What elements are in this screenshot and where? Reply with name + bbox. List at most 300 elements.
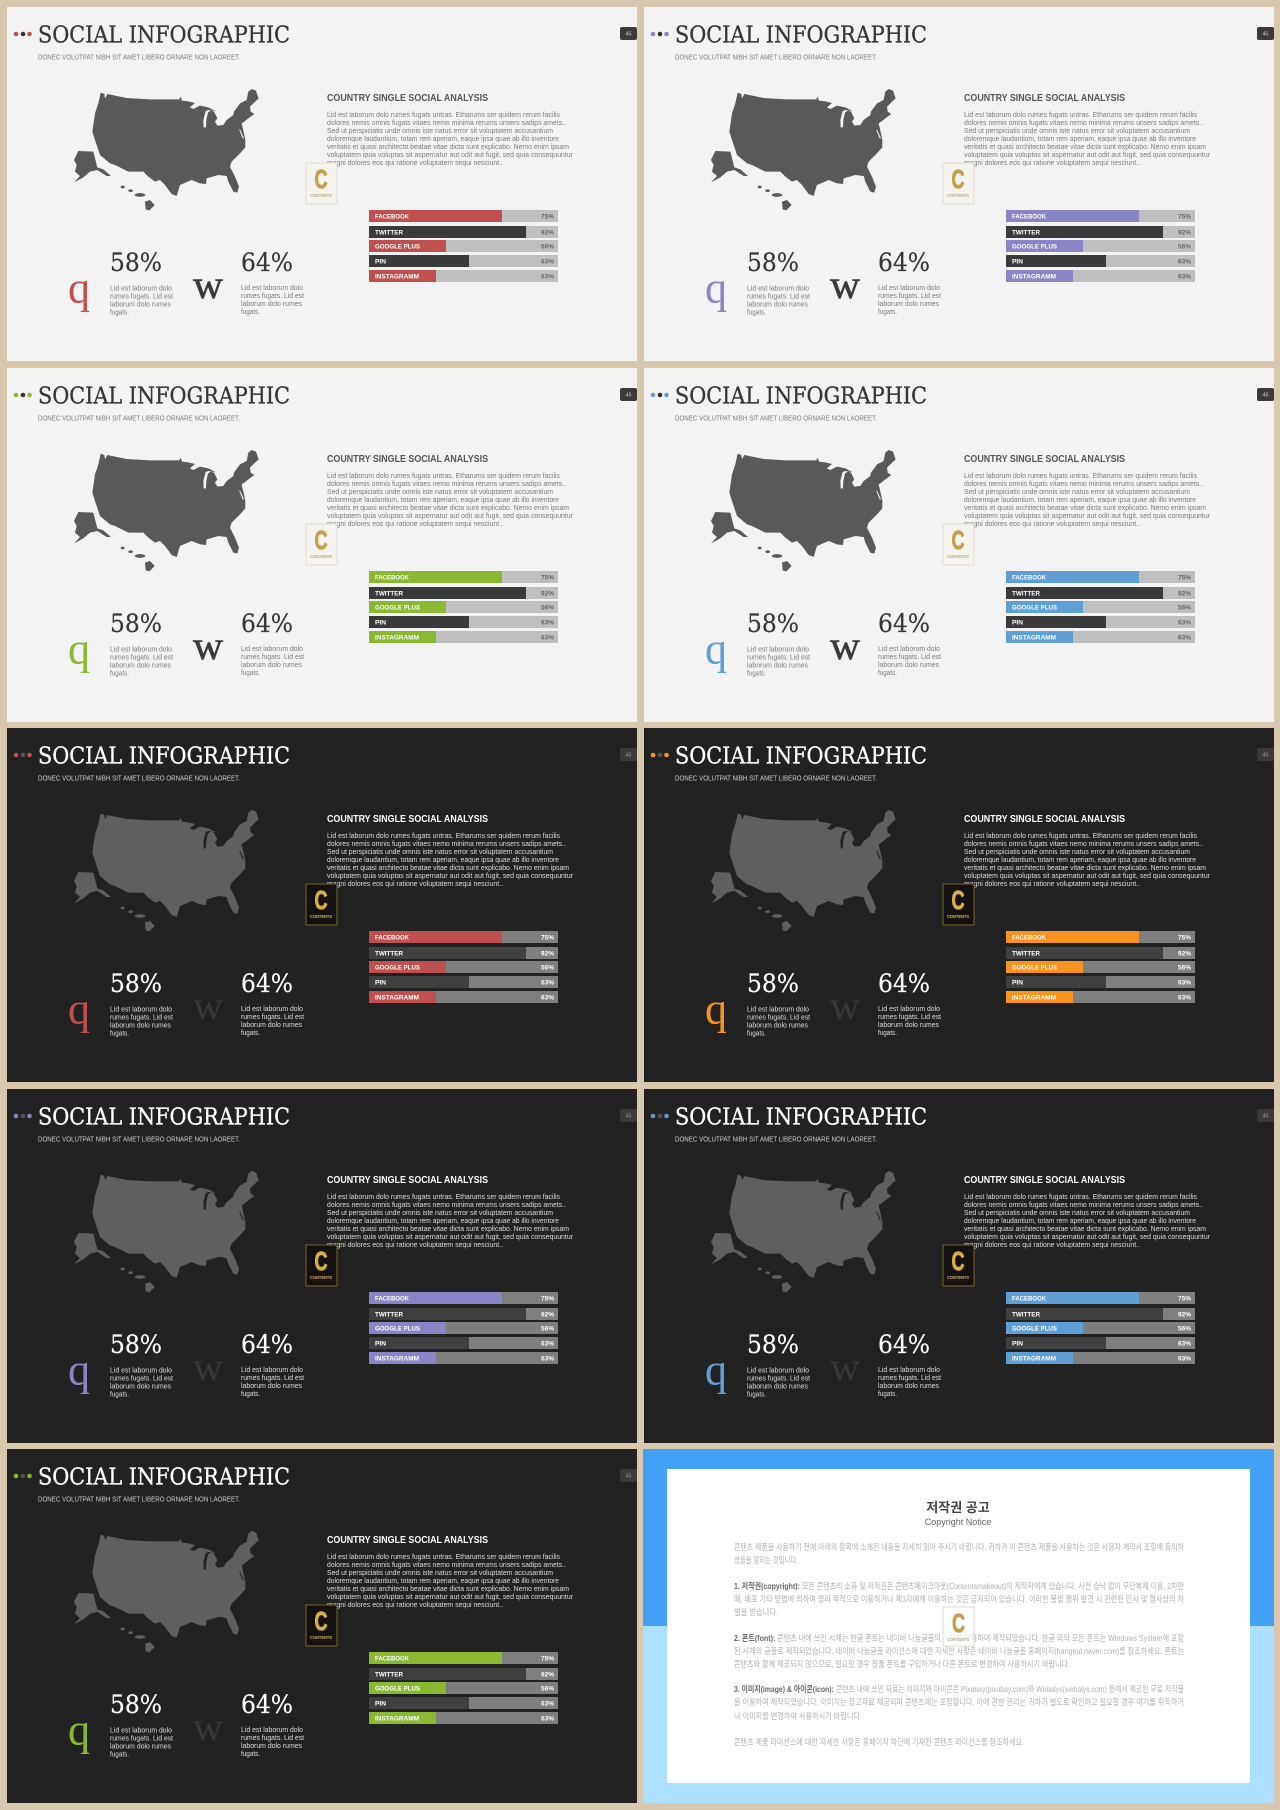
bar chart: INSTAGRAMM: [1012, 634, 1056, 641]
stat: 64%: rumes fugats. Lid est: [878, 1373, 941, 1382]
bar chart: [369, 210, 558, 282]
bar chart: 63%: [1178, 635, 1192, 641]
stat: 58%: Lid est laborum dolo: [110, 284, 172, 292]
icon: q: q: [705, 984, 727, 1034]
page badge: [620, 748, 637, 761]
bar chart: 56%: [541, 965, 555, 971]
analysis text block: Lid est laborum dolo rumes fugats untras. Etharums ser quidem rerum facilis: [327, 471, 560, 480]
stat: 64%: fugats.: [241, 1389, 260, 1398]
bar chart: 63%: [1178, 274, 1192, 280]
stat: 64%: laborum dolo rumes: [878, 1020, 939, 1029]
copyright section 3: [734, 1683, 1184, 1721]
title: SOCIAL INFOGRAPHIC: [38, 384, 290, 410]
analysis text block: magni dolores eos qui ratione voluptatem sequi nesciunt..: [327, 519, 503, 528]
subtitle: DONEC VOLUTPAT NIBH SIT AMET LIBERO ORNARE NON LAOREET.: [38, 1136, 240, 1144]
bar chart: INSTAGRAMM: [375, 1355, 419, 1362]
stat: 58%: laborum dolo rumes: [747, 300, 808, 308]
analysis text block: Lid est laborum dolo rumes fugats untras. Etharums ser quidem rerum facilis: [327, 110, 560, 119]
copyright section 3: 을 이용하여 제작되었습니다. 이미지는 참고자료 제공되며 콘텐츠에는 포함합니다. 이에 관한 권리는 귀하가 별도로 확인하고 필요할 경우 여기를 취득하거: [734, 1696, 1184, 1707]
stat: 64%: laborum dolo rumes: [241, 1020, 302, 1029]
logo stamp: [306, 1605, 337, 1646]
stat: 58%: [747, 609, 810, 678]
title: SOCIAL INFOGRAPHIC: [675, 1104, 927, 1130]
stat: 64%: fugats.: [241, 1749, 260, 1758]
stat: 64%: Lid est laborum dolo: [241, 1365, 303, 1374]
analysis text block: doloremque laudantium, totam rem aperiam, eaque ipsa quae ab illo inventore: [964, 855, 1196, 864]
bar chart: INSTAGRAMM: [1012, 994, 1056, 1001]
bar chart: INSTAGRAMM: [375, 994, 419, 1001]
bar chart: TWITTER: [375, 229, 403, 236]
analysis text block: Sed ut perspiciatis unde omnis iste natus error sit voluptatem accusantium: [327, 1208, 553, 1217]
analysis text block: Lid est laborum dolo rumes fugats untras. Etharums ser quidem rerum facilis: [327, 831, 560, 840]
stat: 64%: [241, 609, 304, 677]
stat: 64%: [878, 969, 941, 1037]
stat: 64%: rumes fugats. Lid est: [241, 1733, 304, 1742]
bar chart: INSTAGRAMM: [375, 1715, 419, 1722]
bar chart: FACEBOOK: [1012, 574, 1046, 581]
copyright heading: 저작권 공고: [926, 1500, 990, 1515]
analysis text block: COUNTRY SINGLE SOCIAL ANALYSIS: [327, 92, 488, 104]
bar chart: 56%: [1178, 605, 1192, 611]
analysis text block: voluptatem quia voluptas sit aspernatur aut odit aut fugit, sed quia consequuntur: [327, 511, 574, 520]
panel: light red slide: [7, 7, 637, 361]
title dots: [651, 393, 669, 397]
bar chart: GOOGLE PLUS: [375, 964, 421, 971]
stat: 58%: 58%: [110, 1690, 162, 1720]
analysis text block: COUNTRY SINGLE SOCIAL ANALYSIS: [327, 1174, 488, 1186]
stat: 64%: 64%: [241, 969, 293, 999]
panel: dark blue slide: [644, 1089, 1274, 1443]
analysis text block: magni dolores eos qui ratione voluptatem sequi nesciunt..: [964, 1240, 1140, 1249]
subtitle: DONEC VOLUTPAT NIBH SIT AMET LIBERO ORNARE NON LAOREET.: [38, 1496, 240, 1504]
analysis text block: dolores nemis omnis fugats vitaes nemo minima rerums unsers sadips amets..: [327, 1560, 566, 1569]
logo stamp: C: [952, 164, 965, 194]
analysis text block: doloremque laudantium, totam rem aperiam, eaque ipsa quae ab illo inventore: [964, 134, 1196, 143]
icon: w: w: [193, 1704, 223, 1749]
bar chart: GOOGLE PLUS: [375, 1685, 421, 1692]
icon: w: w: [830, 623, 860, 668]
stat: 58%: 58%: [747, 609, 799, 639]
analysis text block: doloremque laudantium, totam rem aperiam, eaque ipsa quae ab illo inventore: [327, 1216, 559, 1225]
panel: light green slide: [7, 368, 637, 722]
US map: [711, 810, 896, 931]
analysis text block: Sed ut perspiciatis unde omnis iste natus error sit voluptatem accusantium: [964, 126, 1190, 135]
bar chart: GOOGLE PLUS: [1012, 243, 1058, 250]
stat: 64%: [241, 248, 304, 316]
subtitle: DONEC VOLUTPAT NIBH SIT AMET LIBERO ORNARE NON LAOREET.: [675, 54, 877, 62]
logo stamp: [943, 524, 974, 565]
page badge: 45: [625, 1474, 632, 1480]
bar chart: FACEBOOK: [1012, 934, 1046, 941]
analysis text block: [327, 1174, 574, 1249]
stat: 58%: rumes fugats. Lid est: [110, 1012, 173, 1022]
bar chart: FACEBOOK: [375, 1655, 409, 1662]
bar chart: [1006, 1292, 1195, 1364]
stat: 64%: 64%: [241, 609, 293, 639]
bar chart: INSTAGRAMM: [1012, 1355, 1056, 1362]
stat: 58%: Lid est laborum dolo: [110, 1726, 172, 1734]
stat: 64%: fugats.: [878, 668, 897, 677]
stat: 58%: Lid est laborum dolo: [110, 1366, 172, 1374]
stat: 58%: [110, 1330, 173, 1398]
stat: 58%: [747, 248, 810, 316]
analysis text block: magni dolores eos qui ratione voluptatem sequi nesciunt..: [964, 519, 1140, 528]
logo stamp: C: [314, 1606, 328, 1636]
stat: 58%: fugats.: [110, 1750, 129, 1758]
bar chart: GOOGLE PLUS: [375, 243, 421, 250]
title dots: [14, 753, 32, 757]
stat: 58%: Lid est laborum dolo: [747, 1004, 809, 1014]
page badge: 45: [625, 32, 632, 38]
bar chart: 63%: [541, 1716, 555, 1722]
analysis text block: Sed ut perspiciatis unde omnis iste natus error sit voluptatem accusantium: [964, 847, 1190, 856]
bar chart: 56%: [541, 244, 555, 250]
bar chart: 75%: [541, 1296, 555, 1302]
icon: w: w: [193, 1344, 223, 1389]
bar chart: 56%: [541, 1686, 555, 1692]
analysis text block: veritatis et quasi architecto beatae vitae dicta sunt explicabo. Nemo enim ipsam: [327, 863, 569, 872]
analysis text block: Sed ut perspiciatis unde omnis iste natus error sit voluptatem accusantium: [327, 487, 553, 496]
bar chart: [369, 931, 558, 1003]
logo stamp: [943, 884, 974, 925]
icon: q: q: [68, 984, 90, 1034]
page badge: [1257, 748, 1274, 761]
stat: 64%: Lid est laborum dolo: [241, 283, 303, 292]
analysis text block: veritatis et quasi architecto beatae vitae dicta sunt explicabo. Nemo enim ipsam: [964, 863, 1206, 872]
icon: w: w: [193, 983, 223, 1028]
copyright intro text: 콘텐츠 제품을 사용하기 전에 아래의 항목에 소개된 내용을 자세히 읽어 주시기 바랍니다. 귀하가 이 콘텐츠 제품을 사용하는 것은 사용자 계약서 조항에 동의하: [734, 1541, 1184, 1552]
icon: w: w: [193, 262, 223, 307]
analysis text block: COUNTRY SINGLE SOCIAL ANALYSIS: [964, 92, 1125, 104]
copyright section 2: [734, 1632, 1184, 1669]
US map: [711, 450, 896, 571]
stat: 58%: fugats.: [747, 1390, 766, 1398]
stat: 58%: [110, 609, 173, 678]
bar chart: 63%: [541, 995, 555, 1001]
analysis text block: COUNTRY SINGLE SOCIAL ANALYSIS: [327, 813, 488, 825]
bar chart: 92%: [1178, 591, 1192, 597]
copyright section 2: 콘텐츠와 함께 제공되지 않으므로, 필요할 경우 정품 폰트를 구입하거나 다른 폰트로 변경하여 사용하시기 바랍니다.: [734, 1658, 1070, 1669]
page badge: 45: [1262, 392, 1269, 398]
stat: 64%: 64%: [241, 1690, 293, 1720]
stat: 58%: laborum dolo rumes: [110, 1742, 171, 1750]
panel: dark red slide: [7, 728, 637, 1082]
copyright section 1: 매, 배포 기타 방법에 의하여 영리 목적으로 이용하거나 제3자에게 이용하는 것은 금지되어 있습니다. 이러한 불법 행위 발견 시 관련된 민사 및 형사상의 처: [734, 1593, 1184, 1604]
icon: q: q: [68, 264, 90, 312]
stat: 64%: rumes fugats. Lid est: [241, 652, 304, 661]
stat: 58%: fugats.: [747, 308, 766, 316]
logo stamp: [943, 1245, 974, 1286]
bar chart: [1006, 571, 1195, 643]
stat: 58%: rumes fugats. Lid est: [110, 652, 173, 662]
title: SOCIAL INFOGRAPHIC: [38, 744, 290, 770]
stat: 64%: [241, 1690, 304, 1758]
stat: 64%: [878, 609, 941, 677]
analysis text block: Sed ut perspiciatis unde omnis iste natus error sit voluptatem accusantium: [327, 847, 553, 856]
bar chart: 56%: [1178, 244, 1192, 250]
title: SOCIAL INFOGRAPHIC: [38, 22, 290, 48]
analysis text block: Lid est laborum dolo rumes fugats untras. Etharums ser quidem rerum facilis: [964, 110, 1197, 119]
analysis text block: doloremque laudantium, totam rem aperiam, eaque ipsa quae ab illo inventore: [327, 855, 559, 864]
analysis text block: dolores nemis omnis fugats vitaes nemo minima rerums unsers sadips amets..: [327, 1200, 566, 1209]
analysis text block: Sed ut perspiciatis unde omnis iste natus error sit voluptatem accusantium: [327, 1568, 553, 1577]
stat: 64%: fugats.: [241, 307, 260, 316]
analysis text block: dolores nemis omnis fugats vitaes nemo minima rerums unsers sadips amets..: [964, 479, 1203, 488]
title: SOCIAL INFOGRAPHIC: [675, 22, 927, 48]
analysis text block: veritatis et quasi architecto beatae vitae dicta sunt explicabo. Nemo enim ipsam: [327, 503, 569, 512]
analysis text block: COUNTRY SINGLE SOCIAL ANALYSIS: [964, 813, 1125, 825]
stat: 58%: 58%: [747, 1330, 799, 1360]
copyright section 1: 벌을 받습니다.: [734, 1607, 778, 1617]
stat: 58%: fugats.: [747, 1028, 766, 1038]
bar chart: TWITTER: [1012, 950, 1040, 957]
logo stamp: C: [314, 164, 328, 194]
analysis text block: dolores nemis omnis fugats vitaes nemo minima rerums unsers sadips amets..: [964, 118, 1203, 127]
title: SOCIAL INFOGRAPHIC: [38, 1104, 290, 1130]
stat: 64%: rumes fugats. Lid est: [241, 1373, 304, 1382]
analysis text block: veritatis et quasi architecto beatae vitae dicta sunt explicabo. Nemo enim ipsam: [964, 1224, 1206, 1233]
analysis text block: dolores nemis omnis fugats vitaes nemo minima rerums unsers sadips amets..: [327, 839, 566, 848]
title: SOCIAL INFOGRAPHIC: [675, 384, 927, 410]
analysis text block: doloremque laudantium, totam rem aperiam, eaque ipsa quae ab illo inventore: [964, 1216, 1196, 1225]
analysis text block: doloremque laudantium, totam rem aperiam, eaque ipsa quae ab illo inventore: [327, 134, 559, 143]
analysis text block: [964, 1174, 1211, 1249]
bar chart: TWITTER: [1012, 229, 1040, 236]
copyright section 1: [734, 1580, 1184, 1617]
bar chart: GOOGLE PLUS: [1012, 964, 1058, 971]
stat: 64%: 64%: [241, 248, 293, 278]
stat: 64%: Lid est laborum dolo: [878, 1365, 940, 1374]
bar chart: FACEBOOK: [375, 1295, 409, 1302]
analysis text block: [327, 453, 574, 528]
panel: dark orange slide: [644, 728, 1274, 1082]
bar chart: FACEBOOK: [375, 934, 409, 941]
analysis text block: doloremque laudantium, totam rem aperiam, eaque ipsa quae ab illo inventore: [327, 495, 559, 504]
logo stamp: CONTENTS: [947, 914, 969, 919]
bar chart: FACEBOOK: [375, 213, 409, 220]
stat: 58%: Lid est laborum dolo: [747, 284, 809, 292]
stat: 58%: fugats.: [747, 668, 766, 678]
icon: q: q: [705, 264, 727, 312]
logo stamp: C: [314, 1246, 328, 1276]
page badge: [1257, 1109, 1274, 1122]
stat: 58%: Lid est laborum dolo: [110, 644, 172, 654]
stat: 64%: rumes fugats. Lid est: [878, 1012, 941, 1021]
bar chart: 75%: [541, 575, 555, 581]
bar chart: PIN: [1012, 979, 1023, 986]
US map: [711, 89, 896, 210]
title: SOCIAL INFOGRAPHIC: [38, 1464, 290, 1490]
bar chart: 63%: [541, 1341, 555, 1347]
analysis text block: COUNTRY SINGLE SOCIAL ANALYSIS: [964, 453, 1125, 465]
copyright section 3: 나 이미지를 변경하여 사용하시기 바랍니다.: [734, 1710, 862, 1721]
bar chart: 63%: [1178, 1356, 1192, 1362]
stat: 64%: Lid est laborum dolo: [241, 1004, 303, 1013]
stat: 64%: laborum dolo rumes: [878, 299, 939, 308]
bar chart: 75%: [541, 214, 555, 220]
analysis text block: veritatis et quasi architecto beatae vitae dicta sunt explicabo. Nemo enim ipsam: [964, 503, 1206, 512]
stat: 64%: fugats.: [878, 1389, 897, 1398]
page badge: [1257, 388, 1274, 401]
stat: 58%: Lid est laborum dolo: [747, 1366, 809, 1374]
stat: 58%: laborum dolo rumes: [110, 1020, 171, 1030]
stat: 64%: fugats.: [878, 1028, 897, 1037]
stat: 58%: [110, 1690, 173, 1758]
analysis text block: Sed ut perspiciatis unde omnis iste natus error sit voluptatem accusantium: [964, 1208, 1190, 1217]
bar chart: 63%: [1178, 620, 1192, 626]
stat: 64%: Lid est laborum dolo: [878, 1004, 940, 1013]
panel: light purple slide: [644, 7, 1274, 361]
stat: 58%: fugats.: [110, 1028, 129, 1038]
stat: 64%: 64%: [878, 609, 930, 639]
bar chart: INSTAGRAMM: [375, 273, 419, 280]
icon: w: w: [830, 262, 860, 307]
icon: q: q: [68, 624, 90, 674]
analysis text block: Lid est laborum dolo rumes fugats untras. Etharums ser quidem rerum facilis: [964, 1192, 1197, 1201]
analysis text block: [327, 1534, 574, 1609]
title dots: [651, 753, 669, 757]
stat: 58%: laborum dolo rumes: [747, 1382, 808, 1390]
stat: 64%: rumes fugats. Lid est: [878, 291, 941, 300]
analysis text block: voluptatem quia voluptas sit aspernatur aut odit aut fugit, sed quia consequuntur: [327, 1232, 574, 1241]
logo stamp: [306, 1245, 337, 1286]
bar chart: 92%: [541, 591, 555, 597]
analysis text block: dolores nemis omnis fugats vitaes nemo minima rerums unsers sadips amets..: [964, 839, 1203, 848]
stat: 58%: fugats.: [110, 668, 129, 678]
bar chart: 63%: [541, 1701, 555, 1707]
bar chart: TWITTER: [375, 590, 403, 597]
bar chart: [369, 1292, 558, 1364]
bar chart: 63%: [1178, 1341, 1192, 1347]
copyright section 3: 3. 이미지(image) & 아이콘(icon): 콘텐츠 내에 쓰인 자료는 이미지와 아이콘은 Pixabay(pixabay.com)와 Webalys(webalys.com) 등에서 제공된 무료 저작물: [734, 1683, 1184, 1694]
bar chart: PIN: [1012, 1340, 1023, 1347]
bar chart: GOOGLE PLUS: [1012, 604, 1058, 611]
US map: [74, 450, 259, 571]
analysis text block: [964, 813, 1211, 888]
bar chart: 63%: [541, 1356, 555, 1362]
stat: 64%: Lid est laborum dolo: [241, 644, 303, 653]
subtitle: DONEC VOLUTPAT NIBH SIT AMET LIBERO ORNARE NON LAOREET.: [675, 416, 877, 422]
stat: 58%: 58%: [110, 1330, 162, 1360]
analysis text block: magni dolores eos qui ratione voluptatem sequi nesciunt..: [327, 879, 503, 888]
panel: copyright notice: [643, 1449, 1274, 1803]
page badge: 45: [625, 1114, 632, 1120]
stat: 58%: rumes fugats. Lid est: [110, 292, 173, 300]
bar chart: TWITTER: [375, 950, 403, 957]
stat: 64%: 64%: [878, 1330, 930, 1360]
logo stamp: CONTENTS: [310, 914, 332, 919]
page badge: [620, 1109, 637, 1122]
stat: 64%: 64%: [241, 1330, 293, 1360]
stat: 58%: 58%: [747, 248, 799, 278]
bar chart: GOOGLE PLUS: [1012, 1325, 1058, 1332]
stat: 58%: laborum dolo rumes: [747, 1020, 808, 1030]
analysis text block: dolores nemis omnis fugats vitaes nemo minima rerums unsers sadips amets..: [327, 479, 566, 488]
subtitle: DONEC VOLUTPAT NIBH SIT AMET LIBERO ORNARE NON LAOREET.: [38, 416, 240, 422]
copyright intro text: 셨음을 알리는 것입니다.: [734, 1555, 798, 1565]
bar chart: 92%: [541, 230, 555, 236]
bar chart: 63%: [541, 620, 555, 626]
title: SOCIAL INFOGRAPHIC: [675, 744, 927, 770]
page badge: [1257, 27, 1274, 40]
page badge: [620, 1469, 637, 1482]
stat: 64%: rumes fugats. Lid est: [241, 291, 304, 300]
copyright footer line: 콘텐츠 제품 라이선스에 대한 자세한 사항은 홈페이지 하단에 기재된 콘텐츠 라이선스를 참조하세요.: [734, 1736, 1024, 1747]
bar chart: INSTAGRAMM: [375, 634, 419, 641]
bar chart: [1006, 931, 1195, 1003]
stat: 58%: [747, 969, 810, 1038]
bar chart: FACEBOOK: [375, 574, 409, 581]
title dots: [651, 32, 669, 36]
page badge: 45: [1262, 32, 1269, 38]
bar chart: 75%: [541, 1656, 555, 1662]
page badge: 45: [625, 752, 632, 758]
analysis text block: doloremque laudantium, totam rem aperiam, eaque ipsa quae ab illo inventore: [327, 1576, 559, 1585]
icon: q: q: [68, 1346, 90, 1394]
title dots: [14, 393, 32, 397]
stat: 64%: laborum dolo rumes: [878, 660, 939, 669]
analysis text block: Lid est laborum dolo rumes fugats untras. Etharums ser quidem rerum facilis: [327, 1192, 560, 1201]
stat: 58%: Lid est laborum dolo: [110, 1004, 172, 1014]
stat: 58%: rumes fugats. Lid est: [110, 1734, 173, 1742]
stat: 58%: laborum dolo rumes: [747, 660, 808, 670]
bar chart: 56%: [541, 1326, 555, 1332]
analysis text block: Lid est laborum dolo rumes fugats untras. Etharums ser quidem rerum facilis: [327, 1552, 560, 1561]
analysis text block: [327, 92, 574, 167]
US map: [711, 1171, 896, 1292]
icon: q: q: [68, 1706, 90, 1754]
stat: 58%: rumes fugats. Lid est: [747, 1012, 810, 1022]
bar chart: TWITTER: [1012, 1311, 1040, 1318]
logo stamp: C: [314, 525, 328, 555]
analysis text block: veritatis et quasi architecto beatae vitae dicta sunt explicabo. Nemo enim ipsam: [327, 1584, 569, 1593]
page badge: 45: [625, 392, 632, 398]
stat: 64%: laborum dolo rumes: [241, 299, 302, 308]
stat: 64%: rumes fugats. Lid est: [241, 1012, 304, 1021]
analysis text block: magni dolores eos qui ratione voluptatem sequi nesciunt..: [327, 158, 503, 167]
analysis text block: magni dolores eos qui ratione voluptatem sequi nesciunt..: [964, 879, 1140, 888]
logo stamp: [306, 884, 337, 925]
stat: 58%: rumes fugats. Lid est: [747, 292, 810, 300]
bar chart: 75%: [1178, 1296, 1192, 1302]
panel: light blue slide: [644, 368, 1274, 722]
stat: 64%: fugats.: [878, 307, 897, 316]
bar chart: PIN: [375, 979, 386, 986]
stat: 64%: Lid est laborum dolo: [241, 1725, 303, 1734]
bar chart: 75%: [541, 935, 555, 941]
analysis text block: [964, 453, 1211, 528]
analysis text block: COUNTRY SINGLE SOCIAL ANALYSIS: [327, 1534, 488, 1546]
analysis text block: veritatis et quasi architecto beatae vitae dicta sunt explicabo. Nemo enim ipsam: [327, 1224, 569, 1233]
stat: 64%: fugats.: [241, 668, 260, 677]
copyright section 1: 1. 저작권(copyright): 모든 콘텐츠의 소유 및 저작권은 콘텐츠메이크아웃(Contentsmakeout)의 제작자에게 있습니다. 사전 승낙 없이 무단복제 이용, 2차판: [734, 1580, 1184, 1591]
analysis text block: Lid est laborum dolo rumes fugats untras. Etharums ser quidem rerum facilis: [964, 831, 1197, 840]
stat: 64%: 64%: [878, 969, 930, 999]
stat: 64%: [241, 969, 304, 1037]
bar chart: 63%: [1178, 980, 1192, 986]
logo stamp: CONTENTS: [310, 1275, 332, 1280]
logo stamp: CONTENTS: [310, 1635, 332, 1640]
bar chart: 92%: [541, 1672, 555, 1678]
icon: w: w: [193, 623, 223, 668]
copyright section 2: 된 서체의 글꼴로 제작되었습니다. 네이버 나눔글꼴 라이선스에 대한 자세한 사항은 네이버 나눔글꼴 홈페이지(hangeul.naver.com)를 참조하세요. 폰트는: [734, 1645, 1184, 1656]
analysis text block: voluptatem quia voluptas sit aspernatur aut odit aut fugit, sed quia consequuntur: [327, 150, 574, 159]
copyright section 2: 2. 폰트(font): 콘텐츠 내에 쓰인 서체는 한글 폰트는 네이버 나눔글꼴의 서체를 사용하여 제작되었습니다. 한글 외의 모든 폰트는 Windows System에 포함: [734, 1632, 1184, 1643]
panel: dark green slide: [7, 1449, 637, 1803]
bar chart: 92%: [541, 951, 555, 957]
logo stamp: [943, 163, 974, 204]
subtitle: DONEC VOLUTPAT NIBH SIT AMET LIBERO ORNARE NON LAOREET.: [38, 776, 240, 782]
